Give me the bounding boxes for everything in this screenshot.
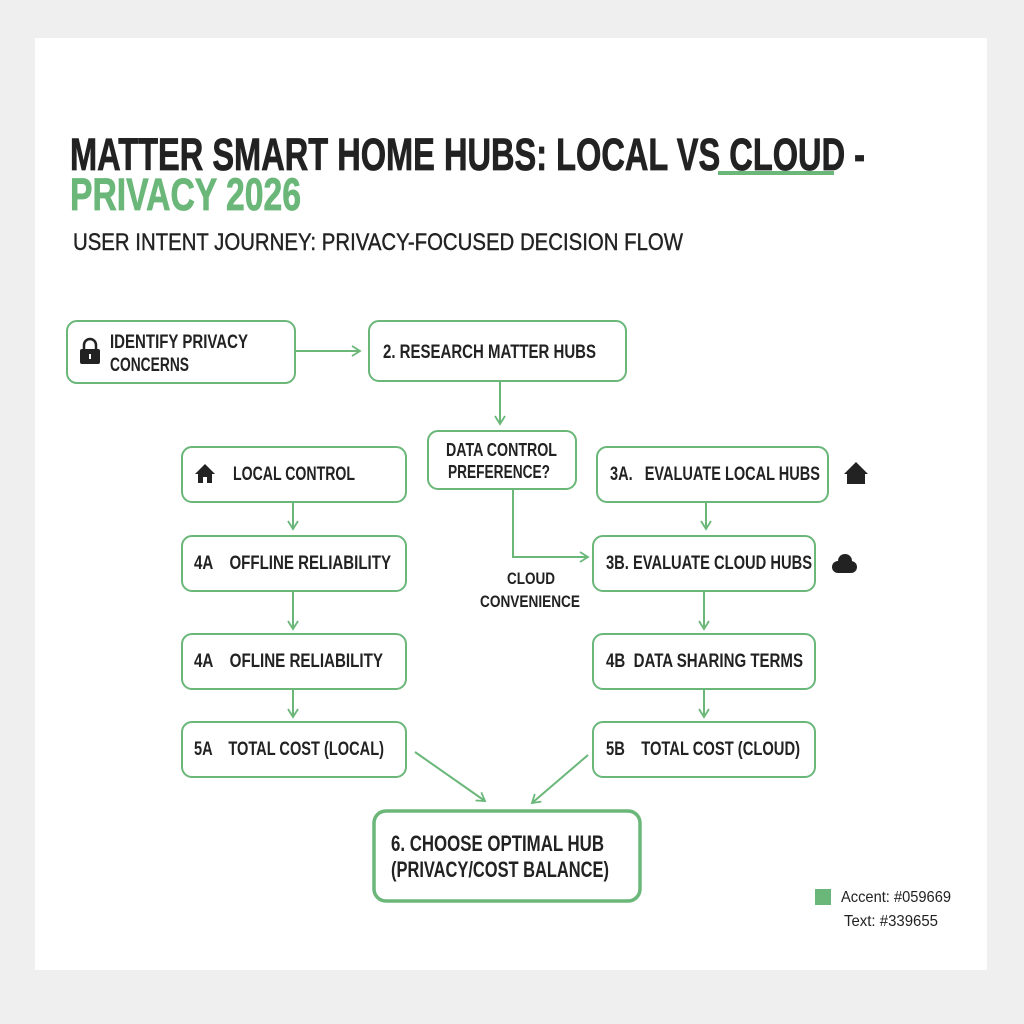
box: 4A ofline reliability: 4A OFLINE RELIABILITY <box>194 651 383 672</box>
arrows <box>293 351 706 803</box>
box: identify privacy concerns: CONCERNS <box>110 355 189 376</box>
icon: house <box>195 464 215 483</box>
box: identify privacy concerns: IDENTIFY PRIVACY <box>110 332 248 353</box>
icon: house right <box>844 462 868 484</box>
box: data control preference: DATA CONTROL <box>446 440 557 460</box>
subtitle: USER INTENT JOURNEY: PRIVACY-FOCUSED DECISION FLOW <box>73 229 683 256</box>
label: cloud convenience: CLOUD <box>507 569 555 588</box>
box: choose optimal hub <box>374 811 640 901</box>
box: 3A evaluate local hubs: 3A. EVALUATE LOCAL HUBS <box>610 464 820 485</box>
legend: Accent: #059669 <box>841 889 951 906</box>
box: 4A offline reliability: 4A OFFLINE RELIABILITY <box>194 553 391 574</box>
box: 5A total cost local <box>182 722 406 777</box>
box: 3B evaluate cloud hubs <box>593 536 815 591</box>
box: 4A ofline reliability <box>182 634 406 689</box>
box: choose optimal hub: 6. CHOOSE OPTIMAL HUB <box>391 831 604 856</box>
box: 3A evaluate local hubs <box>597 447 828 502</box>
box: local control <box>182 447 406 502</box>
box: 4B data sharing terms <box>593 634 815 689</box>
title: PRIVACY 2026 <box>70 169 301 220</box>
label: cloud convenience: CONVENIENCE <box>480 592 580 611</box>
title <box>70 129 865 220</box>
box: research matter hubs: 2. RESEARCH MATTER HUBS <box>383 342 596 363</box>
box: local control: LOCAL CONTROL <box>233 464 355 485</box>
box: data control preference <box>428 431 576 489</box>
label: cloud convenience <box>480 569 580 611</box>
box: 5B total cost cloud <box>593 722 815 777</box>
box: 4B data sharing terms: 4B DATA SHARING TERMS <box>606 651 803 672</box>
icon: cloud <box>832 554 857 573</box>
legend <box>815 889 951 930</box>
box: research matter hubs <box>369 321 626 381</box>
box: choose optimal hub: (PRIVACY/COST BALANCE) <box>391 857 609 882</box>
box: identify privacy concerns <box>67 321 295 383</box>
icon: lock <box>80 339 100 364</box>
box: data control preference: PREFERENCE? <box>448 462 550 482</box>
box: 4A offline reliability <box>182 536 406 591</box>
box: 5B total cost cloud: 5B TOTAL COST (CLOUD) <box>606 739 800 760</box>
box: 5A total cost local: 5A TOTAL COST (LOCAL) <box>194 739 384 760</box>
legend: Text: #339655 <box>844 913 938 930</box>
box: 3B evaluate cloud hubs: 3B. EVALUATE CLOUD HUBS <box>606 553 812 574</box>
